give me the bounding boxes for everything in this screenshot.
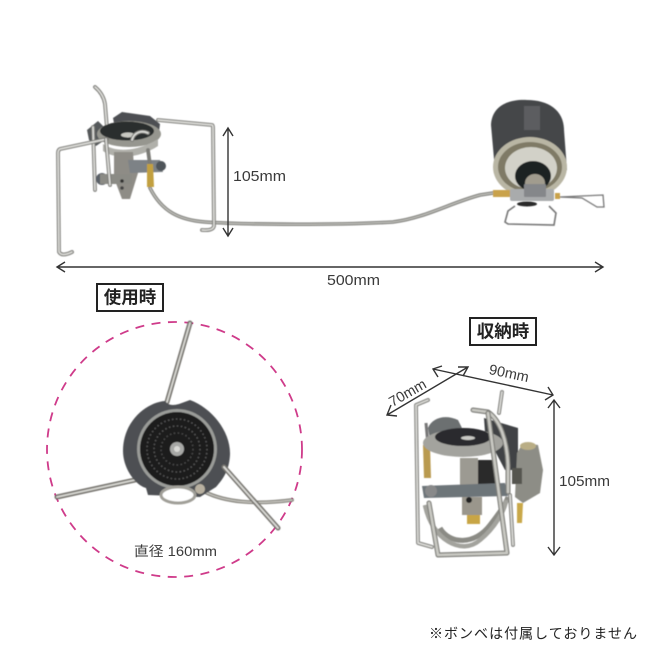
stove: burner and legs — [58, 87, 214, 254]
photo: stove with hose and gas canister — [58, 87, 604, 254]
dimension: height 105mm — [223, 128, 286, 236]
dimension: width 90mm — [433, 362, 553, 400]
heading: in use — [97, 284, 163, 311]
note: canister not included: ※ボンベは付属しておりません — [429, 626, 637, 642]
dimension: depth 70mm — [387, 367, 468, 416]
front leg — [224, 467, 278, 528]
gas canister — [491, 100, 604, 225]
burner head — [422, 417, 518, 524]
burner — [123, 400, 230, 503]
dimension: length 500mm — [57, 262, 603, 289]
heading: in use: 使用時 — [104, 288, 156, 308]
dimension: width 90mm: 90mm — [487, 362, 530, 386]
heading: stored: 収納時 — [477, 322, 529, 342]
dimension: folded height 105mm — [548, 400, 610, 555]
photo: stove from above — [57, 323, 292, 528]
photo: folded stove — [416, 392, 543, 555]
dimension: folded height 105mm: 105mm — [559, 473, 610, 490]
diameter label: 直径 160mm — [134, 544, 217, 559]
hose — [150, 188, 493, 224]
heading: stored — [470, 318, 536, 345]
front frame — [429, 410, 513, 555]
back frame and hose — [416, 392, 508, 547]
diameter circle, dashed — [47, 322, 302, 577]
dimension: height 105mm: 105mm — [233, 168, 286, 185]
dimension: length 500mm: 500mm — [327, 272, 380, 289]
dimension: depth 70mm: 70mm — [387, 377, 429, 411]
regulator — [512, 442, 543, 523]
legs — [57, 323, 292, 502]
